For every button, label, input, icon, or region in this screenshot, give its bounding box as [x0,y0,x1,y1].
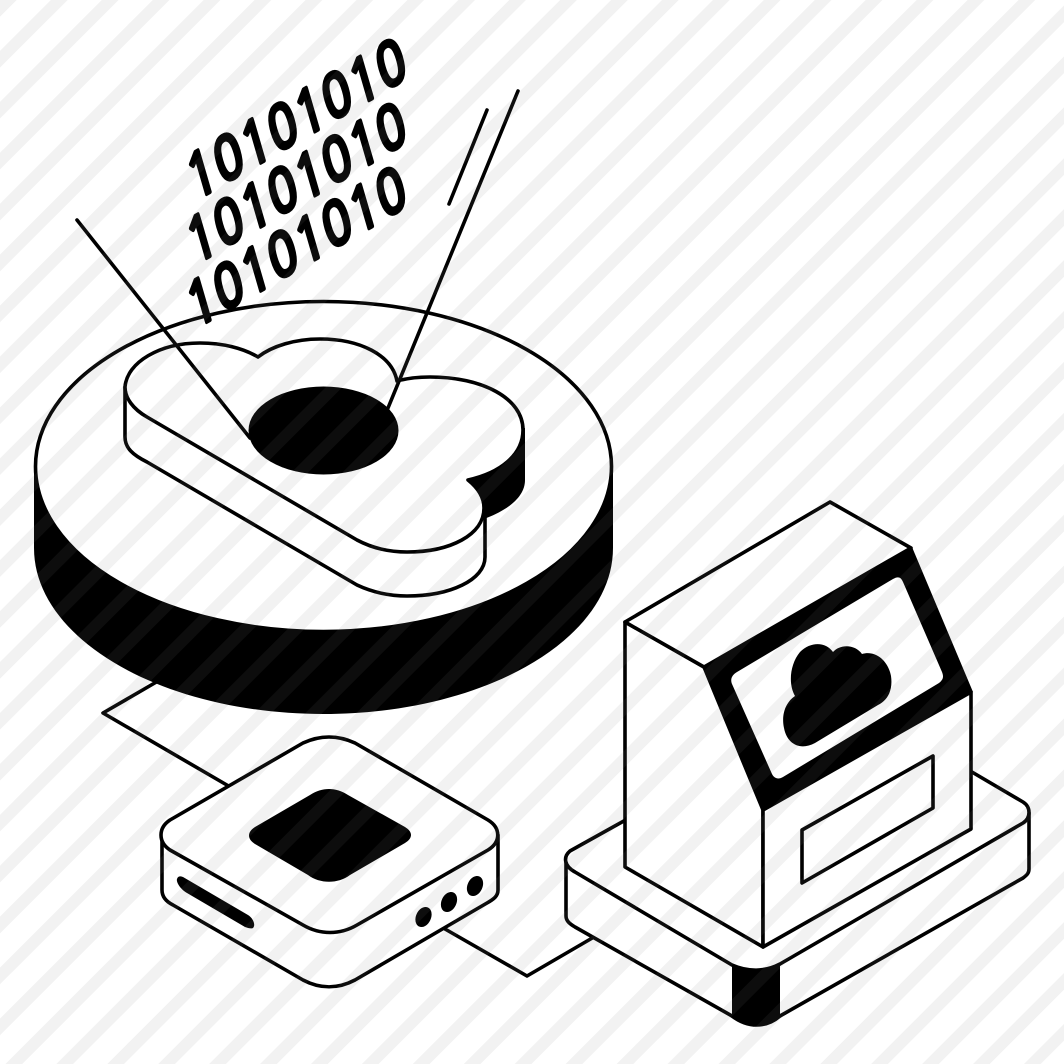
connector: router to kiosk [445,929,594,976]
raised cloud shadow side [468,428,525,519]
kiosk base black corner [732,960,780,1025]
kiosk body left face [625,622,763,947]
cloud storage disc [34,302,613,714]
label plate [802,756,933,883]
kiosk base side [566,813,1029,1025]
router top face [161,737,498,932]
raised cloud top face [125,339,523,552]
router black square [249,789,411,882]
disc centre hole [248,386,398,474]
kiosk top face [625,502,911,667]
screen cloud icon [783,644,891,746]
binary line 2: 10101010 [180,93,413,275]
binary data text [180,29,413,339]
router slot [177,876,254,928]
router indicator dots [412,873,486,930]
disc side wall [34,466,613,714]
router box [161,737,498,987]
screen bezel [704,547,973,811]
binary line 1: 10101010 [180,29,413,211]
short beam [449,110,487,204]
disc top face [36,302,612,632]
dot 3 [464,873,486,899]
kiosk body front face [763,692,971,947]
screen display [731,577,943,778]
connector: disc to router [103,677,232,788]
dot 2 [438,889,460,915]
kiosk base top face [566,765,1029,970]
left beam [77,220,250,438]
right beam [388,91,518,408]
beam lines from hole [77,91,518,438]
raised cloud side wall [125,387,485,596]
binary line 3: 10101010 [180,157,413,339]
kiosk terminal [566,502,1029,1025]
dot 1 [412,904,435,930]
router side [162,835,498,987]
